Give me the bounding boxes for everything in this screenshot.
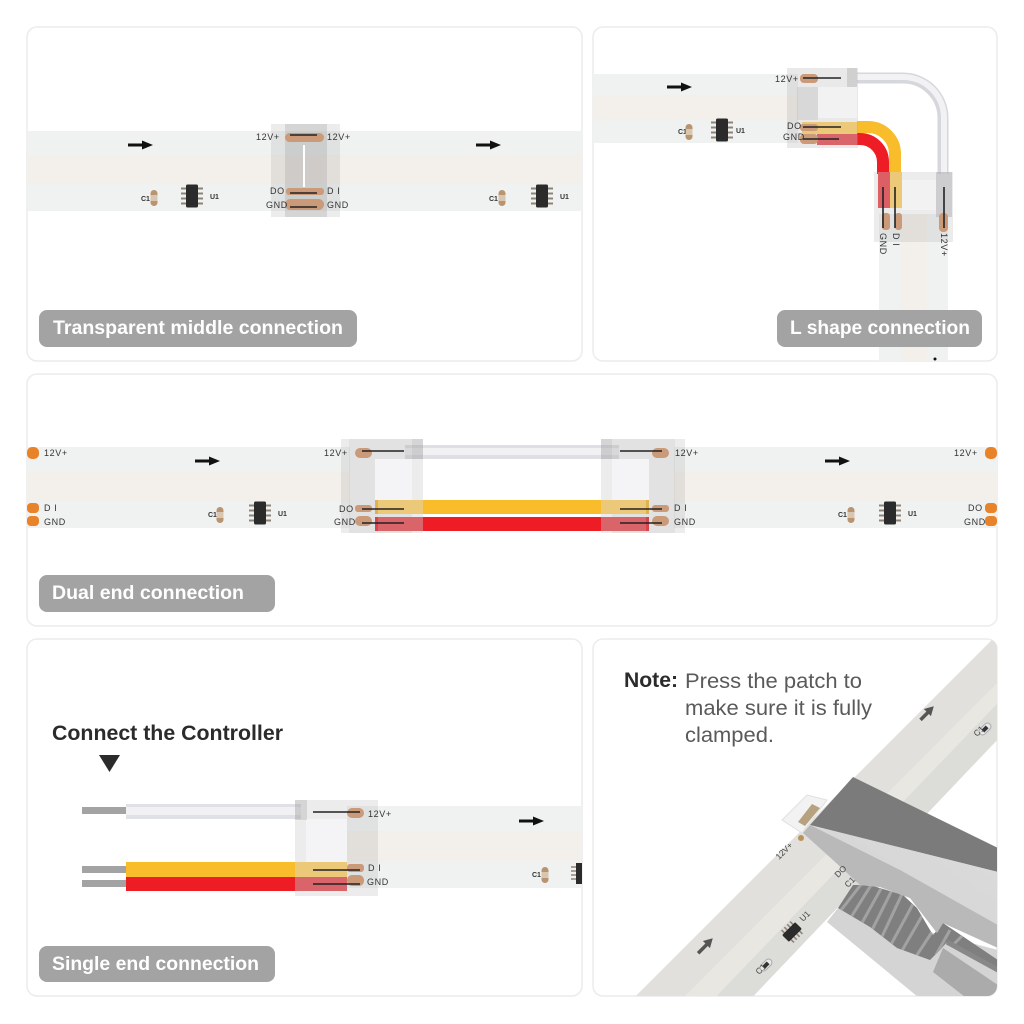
capacitor C1 right: C1 <box>489 196 498 203</box>
pin labels: 12V+ <box>368 809 392 819</box>
label: dual end connection: Dual end connection <box>52 583 244 604</box>
red wire <box>375 517 649 531</box>
capacitor C1: C1 <box>532 872 541 879</box>
strip pin labels: DO <box>832 863 849 879</box>
white wire <box>405 445 619 459</box>
direction arrow right <box>476 140 501 150</box>
chip U1 right: U1 <box>560 194 569 201</box>
vertical LED strip <box>879 214 948 364</box>
pin labels: 12V+ <box>675 448 699 458</box>
capacitor C1 left: C1 <box>141 196 150 203</box>
pin labels: GND <box>674 517 696 527</box>
pin labels: GND <box>334 517 356 527</box>
chip U1 left: U1 <box>278 511 287 518</box>
pin labels: D I <box>891 233 901 246</box>
yellow wire <box>857 127 895 174</box>
pin labels: 12V+ <box>939 233 949 257</box>
pin labels: DO <box>339 504 354 514</box>
capacitor C1: C1 <box>678 129 687 136</box>
LED strip <box>347 806 582 888</box>
LED strip <box>28 131 582 211</box>
pin labels: 12V+ <box>327 132 351 142</box>
yellow wire <box>126 862 301 877</box>
direction arrow <box>667 82 692 92</box>
diagonal LED strip <box>636 640 997 996</box>
pin labels: D I <box>368 863 381 873</box>
panel: single end connection <box>27 639 582 996</box>
pin labels <box>775 74 949 257</box>
left connector clip <box>341 439 423 533</box>
horizontal LED strip <box>593 74 798 143</box>
pin labels: 12V+ <box>775 74 799 84</box>
small arrow upper <box>919 706 934 722</box>
strip end pads <box>27 447 997 526</box>
yellow wire <box>375 500 649 514</box>
note text <box>624 669 873 747</box>
pressing illustration <box>636 640 997 996</box>
connector clip being pressed <box>782 795 827 841</box>
pin labels <box>256 132 351 210</box>
label: dual end connection <box>39 575 275 612</box>
capacitor C1 lower <box>760 958 772 972</box>
pin labels: GND <box>327 200 349 210</box>
label: L shape connection <box>777 310 982 347</box>
capacitor C1 <box>678 124 692 140</box>
pin labels: GND <box>964 517 986 527</box>
pin labels: 12V+ <box>324 448 348 458</box>
capacitor C1 left: C1 <box>208 512 217 519</box>
capacitor C1 <box>532 867 548 883</box>
lower plier jaw <box>827 908 998 997</box>
strip pin labels: 12V+ <box>773 840 795 861</box>
note text: make sure it is fully <box>685 697 873 720</box>
note text: Note: <box>624 669 678 692</box>
connector clip <box>295 800 378 896</box>
pin labels: 12V+ <box>256 132 280 142</box>
label: single end connection: Single end connection <box>52 954 259 975</box>
pin labels: GND <box>266 200 288 210</box>
plier handle inner <box>933 942 998 997</box>
pin labels: D I <box>44 503 57 513</box>
red wire <box>126 877 301 891</box>
direction arrow right <box>825 456 850 466</box>
transparent connector clip <box>271 124 340 217</box>
label: transparent middle connection: Transparent middle connection <box>53 318 343 339</box>
upper plier metal jaw <box>803 825 998 948</box>
chip U1 right: U1 <box>908 511 917 518</box>
pin labels: D I <box>327 186 340 196</box>
direction arrow <box>519 816 544 826</box>
panel: L shape connection <box>593 27 997 364</box>
pin labels: DO <box>968 503 983 513</box>
strip pin labels <box>753 723 986 976</box>
strip pin labels: C1 <box>971 723 986 738</box>
chip U1 right <box>879 502 917 524</box>
chip U1 right <box>531 184 569 208</box>
capacitor C1 left <box>208 507 224 523</box>
heading: connect the controller: Connect the Controller <box>52 722 283 745</box>
pin labels: DO <box>787 121 802 131</box>
vertical connector clip <box>874 172 953 242</box>
pin labels <box>44 448 986 527</box>
strip pin labels: C1 <box>753 961 768 976</box>
pin labels: GND <box>44 517 66 527</box>
strip pin labels: U1 <box>797 908 812 923</box>
label: transparent middle connection <box>39 310 357 347</box>
pin labels <box>367 809 392 887</box>
chip stub <box>571 863 582 884</box>
right LED strip <box>674 447 997 528</box>
upper plier dark face <box>810 777 998 872</box>
direction arrow left <box>195 456 220 466</box>
chip U1 left <box>249 502 287 524</box>
chip U1 <box>781 921 803 943</box>
red wire <box>857 139 883 174</box>
stripped wire ends <box>82 807 126 887</box>
pin labels: GND <box>878 233 888 255</box>
strip pin labels: C1 <box>842 874 857 889</box>
note text: clamped. <box>685 724 774 747</box>
pin labels: D I <box>674 503 687 513</box>
direction arrow left <box>128 140 153 150</box>
right connector clip <box>601 439 685 533</box>
capacitor C1 upper <box>978 722 992 736</box>
capacitor C1 right: C1 <box>838 512 847 519</box>
capacitor C1 left <box>141 190 158 206</box>
panel: note, press the patch <box>593 632 1024 1005</box>
label: L shape connection: L shape connection <box>790 318 970 339</box>
note text: Press the patch to <box>685 670 862 693</box>
chip U1 left <box>181 184 219 208</box>
chip U1: U1 <box>736 128 745 135</box>
capacitor C1 right <box>838 507 854 523</box>
capacitor C1 right <box>489 190 506 206</box>
pin labels: DO <box>270 186 285 196</box>
left LED strip <box>28 447 350 528</box>
label: single end connection <box>39 946 275 982</box>
pin labels: 12V+ <box>44 448 68 458</box>
chip U1 <box>711 118 745 142</box>
pin labels: GND <box>367 877 389 887</box>
white wire <box>126 804 301 819</box>
panel: transparent middle connection <box>27 27 582 361</box>
small arrow lower <box>697 938 713 954</box>
pin labels: GND <box>783 132 805 142</box>
chip U1 left: U1 <box>210 194 219 201</box>
plier teeth <box>838 882 998 970</box>
panel: dual end connection <box>27 374 997 626</box>
pin labels: 12V+ <box>954 448 978 458</box>
icon: down triangle <box>99 755 120 772</box>
white wire <box>857 77 944 174</box>
horizontal connector clip <box>787 68 858 148</box>
